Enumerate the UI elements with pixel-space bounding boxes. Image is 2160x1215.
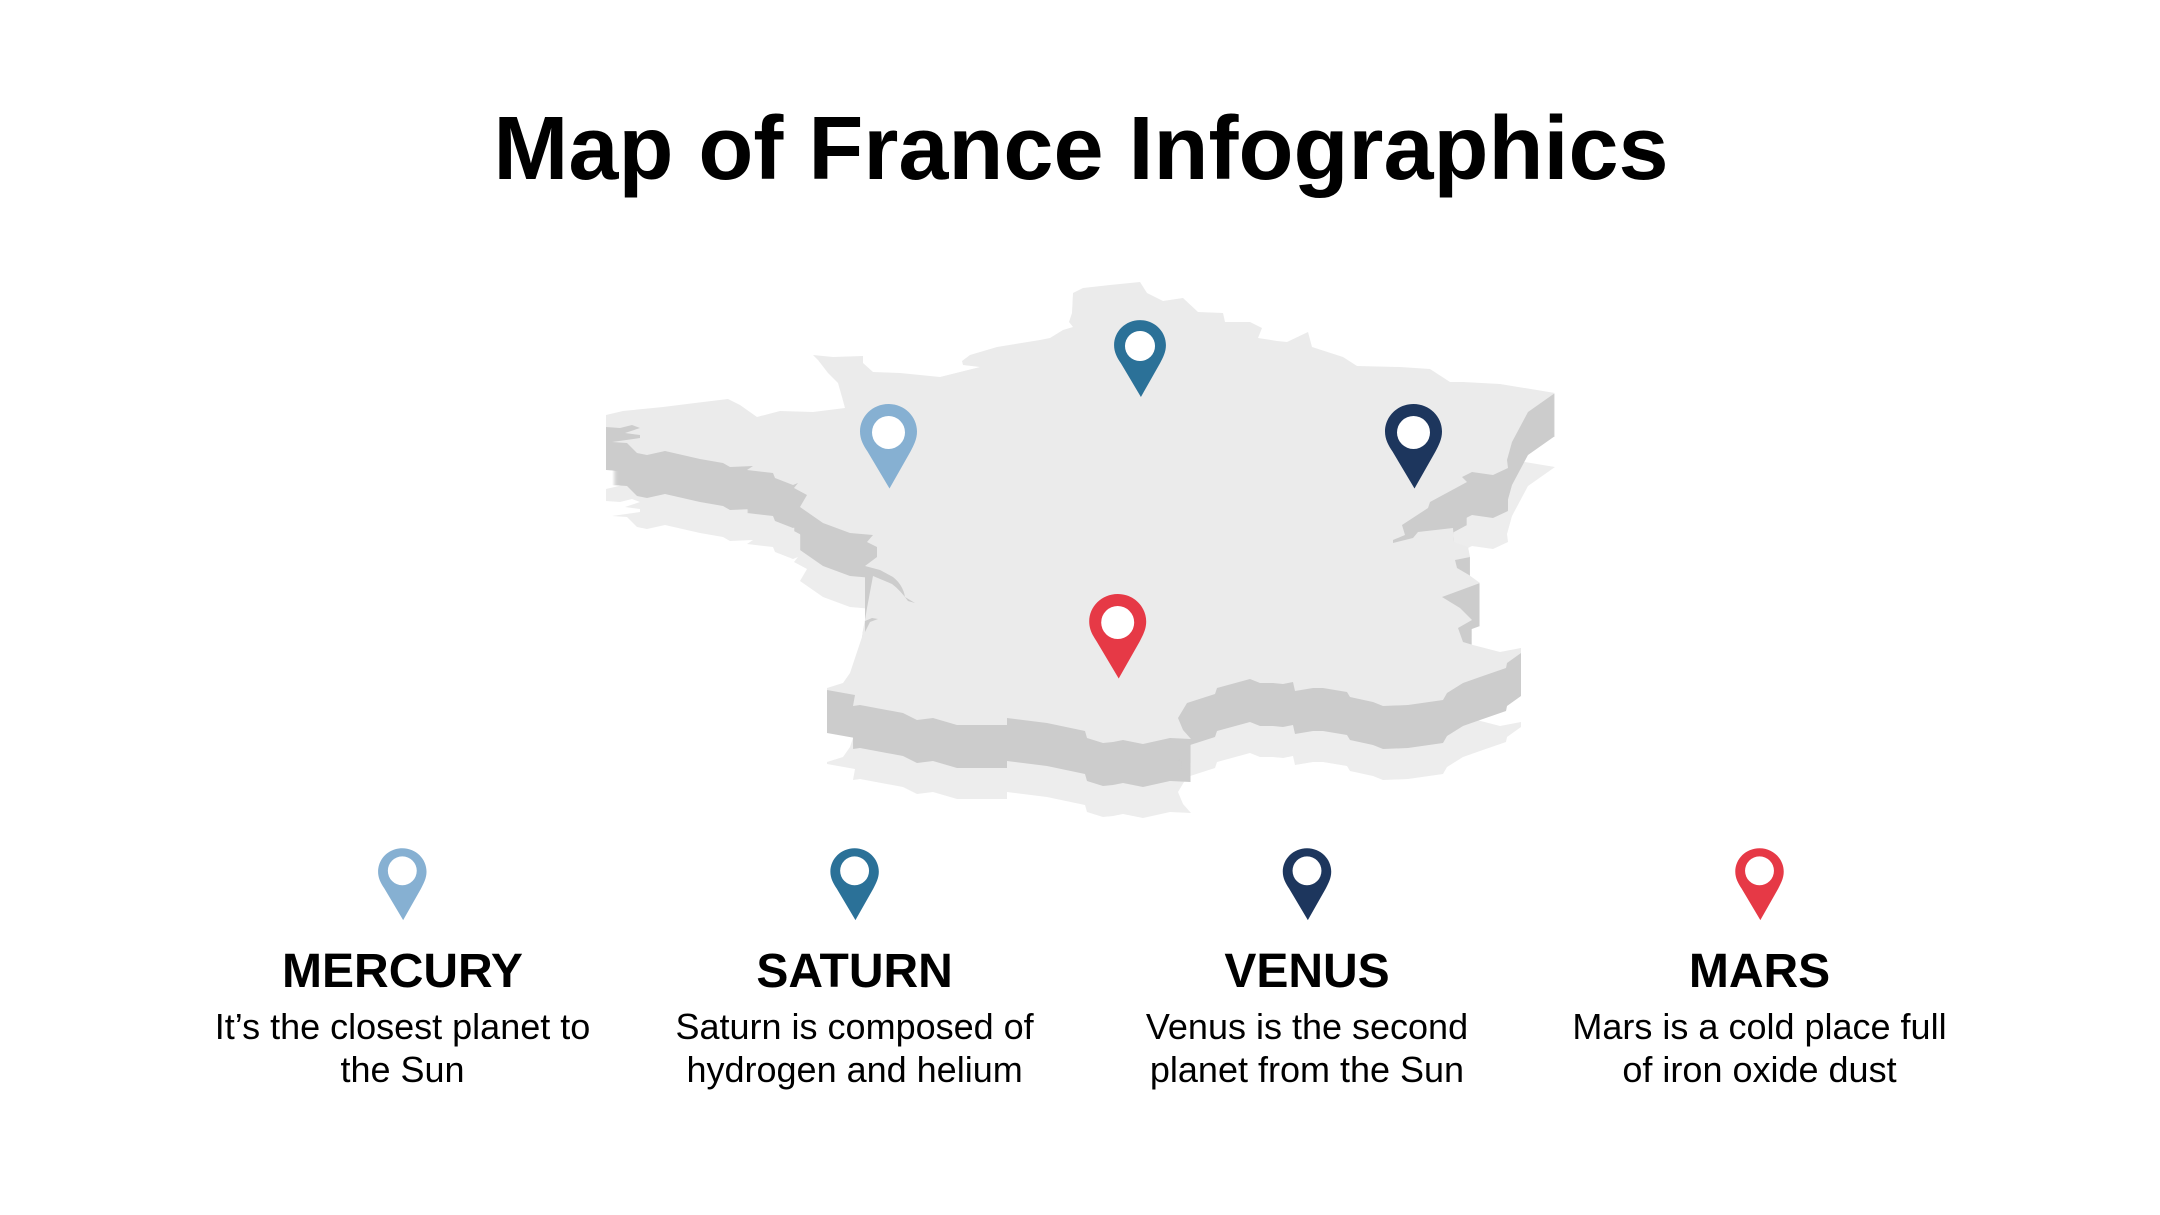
text: Mercury description: It’s the closest planet to <box>215 1006 590 1047</box>
icon: Mars pin <box>1735 848 1784 920</box>
icon: Saturn pin <box>830 848 879 920</box>
legend: Venus <box>1146 848 1468 1090</box>
map reflection layer <box>606 356 1555 818</box>
text: Mars description: Mars is a cold place full <box>1572 1006 1947 1047</box>
Gironde estuary <box>865 566 915 632</box>
map extruded side <box>606 394 1555 787</box>
map top surface <box>606 282 1555 744</box>
title: Map of France Infographics <box>493 99 1669 199</box>
map pin: Mars <box>1089 594 1146 678</box>
icon: Venus pin <box>1283 848 1331 920</box>
text: Venus description: planet from the Sun <box>1150 1049 1464 1090</box>
icon: Mercury pin <box>378 848 427 920</box>
legend: Mars <box>1572 848 1947 1090</box>
text: Saturn description: hydrogen and helium <box>686 1049 1023 1090</box>
legend: Saturn <box>675 848 1035 1090</box>
map of France <box>606 282 1555 818</box>
map pin: Venus <box>1385 404 1442 488</box>
legend: Mercury <box>215 848 590 1090</box>
heading: Mercury: MERCURY <box>282 945 523 998</box>
heading: Mars: MARS <box>1689 945 1830 998</box>
map pin: Saturn <box>1114 320 1166 397</box>
text: Mercury description: the Sun <box>340 1049 465 1090</box>
heading: Venus: VENUS <box>1224 945 1390 998</box>
heading: Saturn: SATURN <box>756 945 953 998</box>
text: Mars description: of iron oxide dust <box>1622 1049 1897 1090</box>
text: Saturn description: Saturn is composed of <box>675 1006 1035 1047</box>
text: Venus description: Venus is the second <box>1146 1006 1468 1047</box>
map pin: Mercury <box>860 404 917 488</box>
